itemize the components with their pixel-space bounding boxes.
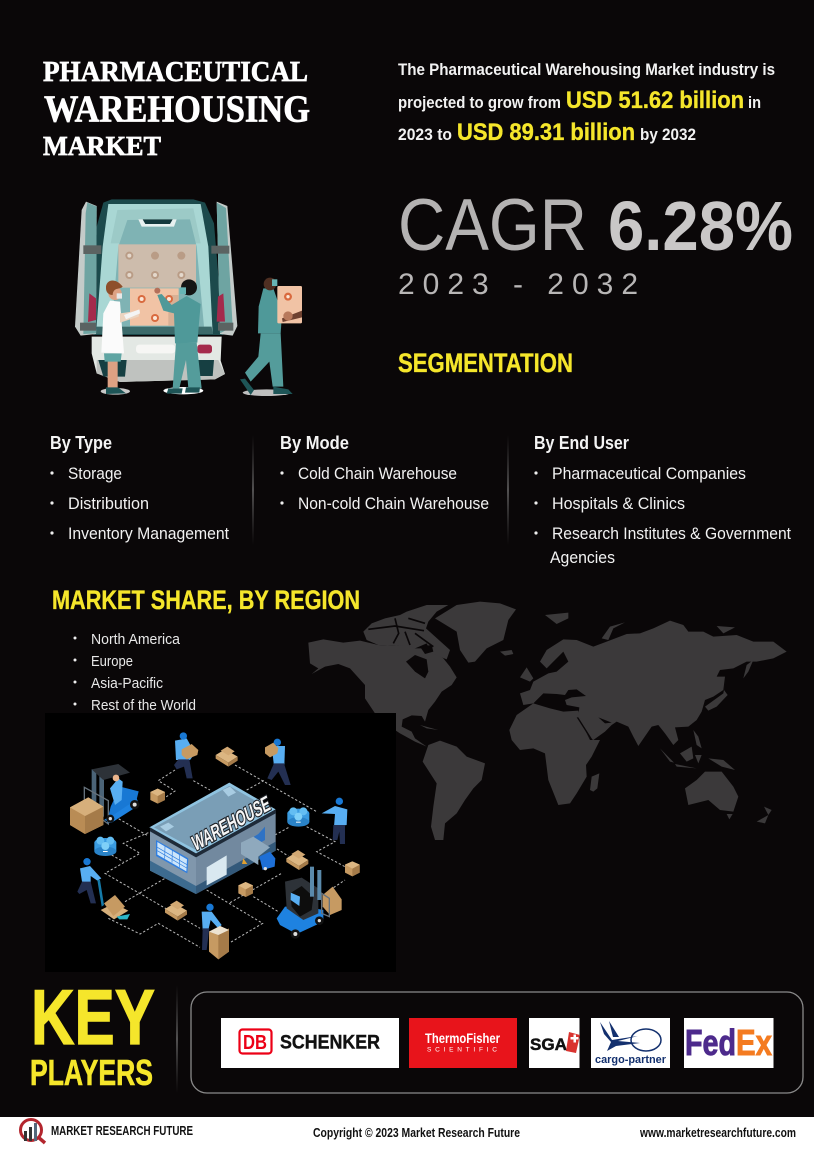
dashed connectors xyxy=(105,765,345,947)
footer bar: MARKET RESEARCH FUTURE xyxy=(51,1124,193,1138)
logo: Thermo Fisher Scientific: SCIENTIFIC xyxy=(427,1046,497,1054)
CAGR callout: 6.28% xyxy=(608,187,793,265)
forecast text block: The Pharmaceutical Warehousing Market industry is xyxy=(398,60,775,79)
title xyxy=(43,56,310,161)
worker at van xyxy=(154,279,203,394)
segmentation: by type: Inventory Management xyxy=(68,524,229,543)
logo: SGA xyxy=(529,1018,580,1068)
logo: DB Schenker xyxy=(221,1018,399,1068)
logo: cargo-partner: cargo-partner xyxy=(595,1054,667,1066)
region list: North America xyxy=(91,631,181,648)
forklift right xyxy=(277,867,342,939)
warehouse building xyxy=(149,783,276,894)
sign: WAREHOUSE: WAREHOUSE xyxy=(190,792,273,856)
workers xyxy=(77,732,347,959)
illustration: pharmaceutical van with workers xyxy=(75,199,302,396)
logo: SGA: SGA xyxy=(530,1035,567,1054)
region list: Europe xyxy=(91,653,133,670)
segmentation: by type: By Type xyxy=(50,432,112,453)
segmentation: by end user: Research Institutes & Government xyxy=(552,524,791,543)
CAGR callout: 2023 - 2032 xyxy=(398,268,638,301)
segmentation: by mode: By Mode xyxy=(280,432,349,453)
title: WAREHOUSING xyxy=(44,88,310,130)
heading: key players: PLAYERS xyxy=(30,1052,153,1093)
segmentation: by type: Storage xyxy=(68,464,122,483)
footer bar xyxy=(0,1117,814,1150)
forecast text block: in xyxy=(748,93,761,112)
logo: DB Schenker: DB xyxy=(243,1032,267,1054)
heading: market share by region: MARKET SHARE, BY REGION xyxy=(52,585,360,615)
left door xyxy=(75,202,97,336)
panel: key player logos xyxy=(191,992,803,1093)
delivery truck xyxy=(241,827,275,870)
forecast text block: USD 51.62 billion xyxy=(566,87,744,114)
logo: FedEx: Fed xyxy=(685,1022,736,1063)
segmentation: by end user xyxy=(534,432,791,567)
region list: Rest of the World xyxy=(91,697,196,714)
region list: Asia-Pacific xyxy=(91,675,163,692)
forecast text block xyxy=(398,60,775,146)
logo: FedEx xyxy=(684,1018,774,1068)
segmentation: by mode: Non-cold Chain Warehouse xyxy=(298,494,489,513)
van body xyxy=(92,199,223,335)
right door xyxy=(217,202,237,336)
heading: key players xyxy=(30,973,155,1093)
segmentation: by end user: Pharmaceutical Companies xyxy=(552,464,746,483)
forecast text block: projected to grow from xyxy=(398,93,561,112)
icon: market research future logo xyxy=(20,1120,45,1143)
segmentation: by type: Distribution xyxy=(68,494,149,513)
segmentation: by type xyxy=(50,432,229,543)
van bumper xyxy=(92,337,225,382)
logo: FedEx: Ex xyxy=(736,1022,772,1063)
logo: DB Schenker: SCHENKER xyxy=(280,1032,380,1054)
boxes and barrels xyxy=(94,747,360,921)
segmentation: by end user: Hospitals & Clinics xyxy=(552,494,685,513)
forecast text block: USD 89.31 billion xyxy=(457,119,635,146)
boxes xyxy=(118,244,196,288)
logo: cargo-partner xyxy=(591,1018,670,1068)
logo: Thermo Fisher Scientific: ThermoFisher xyxy=(425,1031,501,1046)
world map xyxy=(308,602,787,840)
forecast text block: by 2032 xyxy=(640,125,696,144)
illustration: warehouse logistics xyxy=(45,713,396,972)
segmentation: by end user: Agencies xyxy=(550,548,615,567)
worker carrying box xyxy=(240,278,302,396)
heading: key players: KEY xyxy=(31,973,155,1061)
heading: segmentation: SEGMENTATION xyxy=(398,348,573,378)
region list xyxy=(74,631,196,714)
CAGR callout: CAGR xyxy=(398,185,587,266)
forklift left xyxy=(70,764,139,834)
logo: Thermo Fisher Scientific xyxy=(409,1018,517,1068)
nurse xyxy=(101,280,140,395)
footer bar: Copyright © 2023 Market Research Future xyxy=(313,1126,520,1140)
CAGR callout xyxy=(398,185,793,301)
forecast text block: 2023 to xyxy=(398,125,452,144)
segmentation: by mode: Cold Chain Warehouse xyxy=(298,464,457,483)
segmentation: by end user: By End User xyxy=(534,432,629,453)
title: PHARMACEUTICAL xyxy=(43,56,308,88)
segmentation: by mode xyxy=(280,432,489,513)
title: MARKET xyxy=(43,130,161,161)
